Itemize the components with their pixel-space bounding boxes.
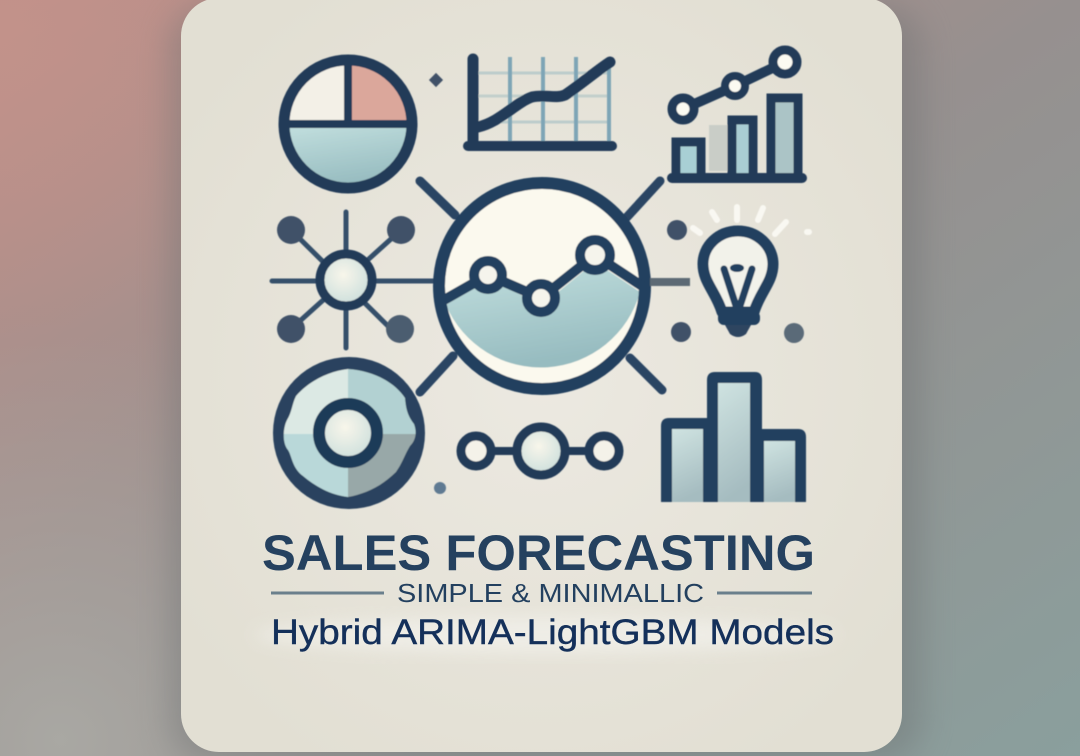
title: SALES FORECASTING — [262, 525, 815, 581]
card panel — [181, 0, 902, 752]
icon: light bulb — [650, 207, 809, 343]
icon: connected nodes — [461, 427, 619, 475]
text glow — [255, 617, 835, 653]
icon: bars with trend line — [672, 50, 802, 178]
model heading: Hybrid ARIMA-LightGBM Models — [271, 613, 834, 652]
icon artwork — [270, 50, 809, 509]
card shadow — [170, 6, 922, 756]
decorative dot — [429, 73, 443, 87]
subtitle with rules: SIMPLE & MINIMALLIC — [397, 578, 704, 608]
icon: gear dial — [270, 357, 426, 509]
icon: network hub — [272, 212, 434, 348]
icon: pie chart — [284, 60, 412, 188]
icon: central forecast circle — [420, 181, 662, 392]
decorative dot — [434, 482, 446, 494]
icon: line chart with grid — [468, 57, 612, 146]
icon: bar chart — [661, 372, 806, 502]
